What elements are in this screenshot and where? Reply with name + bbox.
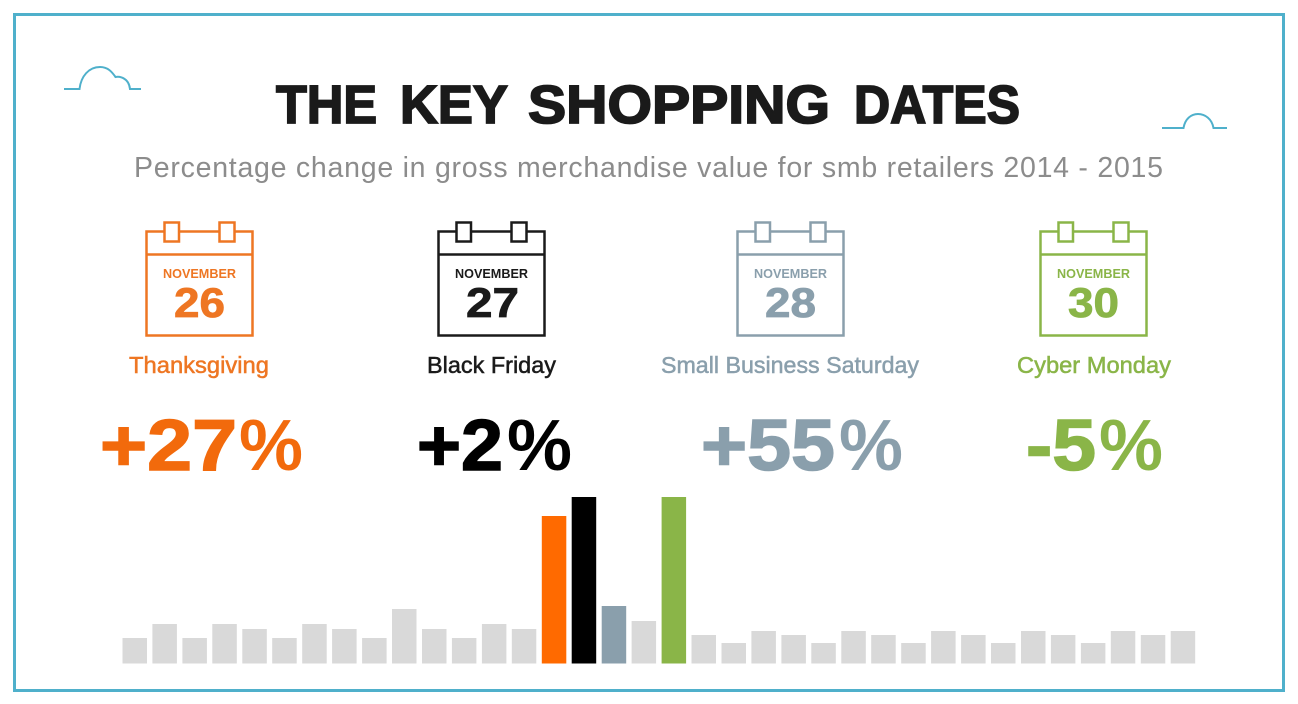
icon: cloud left [64,67,141,89]
icon: calendar November 30 [1040,222,1146,336]
icon: calendar November 27 [438,222,544,336]
title: KEY [400,75,508,135]
value: +55%: +55 [701,406,835,486]
label: Small Business Saturday: Small Business Saturday [661,352,919,378]
panel: Small Business Saturday [661,222,919,486]
label: Cyber Monday: Cyber Monday [1017,352,1172,378]
panel: Thanksgiving [100,222,303,486]
value: -5%: -5 [1026,406,1096,486]
icon: calendar November 30: NOVEMBER [1057,266,1131,281]
value: -5%: % [1099,406,1163,486]
value: +55%: % [839,406,903,486]
icon: calendar November 30: 30 [1068,279,1119,326]
icon: calendar November 26: NOVEMBER [163,266,237,281]
icon: calendar November 26 [146,222,252,336]
icon: calendar November 27: 27 [466,279,519,326]
panel: Black Friday [417,222,572,486]
bar chart [122,497,1195,664]
icon: calendar November 26: 26 [174,279,225,326]
title: THE [276,75,377,135]
label: Black Friday: Black Friday [427,352,556,378]
value: +27%: +27 [100,406,237,486]
value: +27%: % [239,406,303,486]
panel: Cyber Monday [1017,222,1172,486]
title: SHOPPING [528,75,830,135]
icon: calendar November 28: 28 [765,279,816,326]
title: DATES [854,75,1020,135]
icon: calendar November 28: NOVEMBER [754,266,828,281]
subtitle: Percentage change in gross merchandise value for smb retailers 2014 - 2015 [134,152,1163,184]
value: +2%: % [507,406,572,486]
value: +2%: +2 [417,406,503,486]
icon: cloud right [1162,114,1227,128]
icon: calendar November 28 [738,222,844,336]
icon: calendar November 27: NOVEMBER [455,266,529,281]
label: Thanksgiving: Thanksgiving [129,352,269,378]
